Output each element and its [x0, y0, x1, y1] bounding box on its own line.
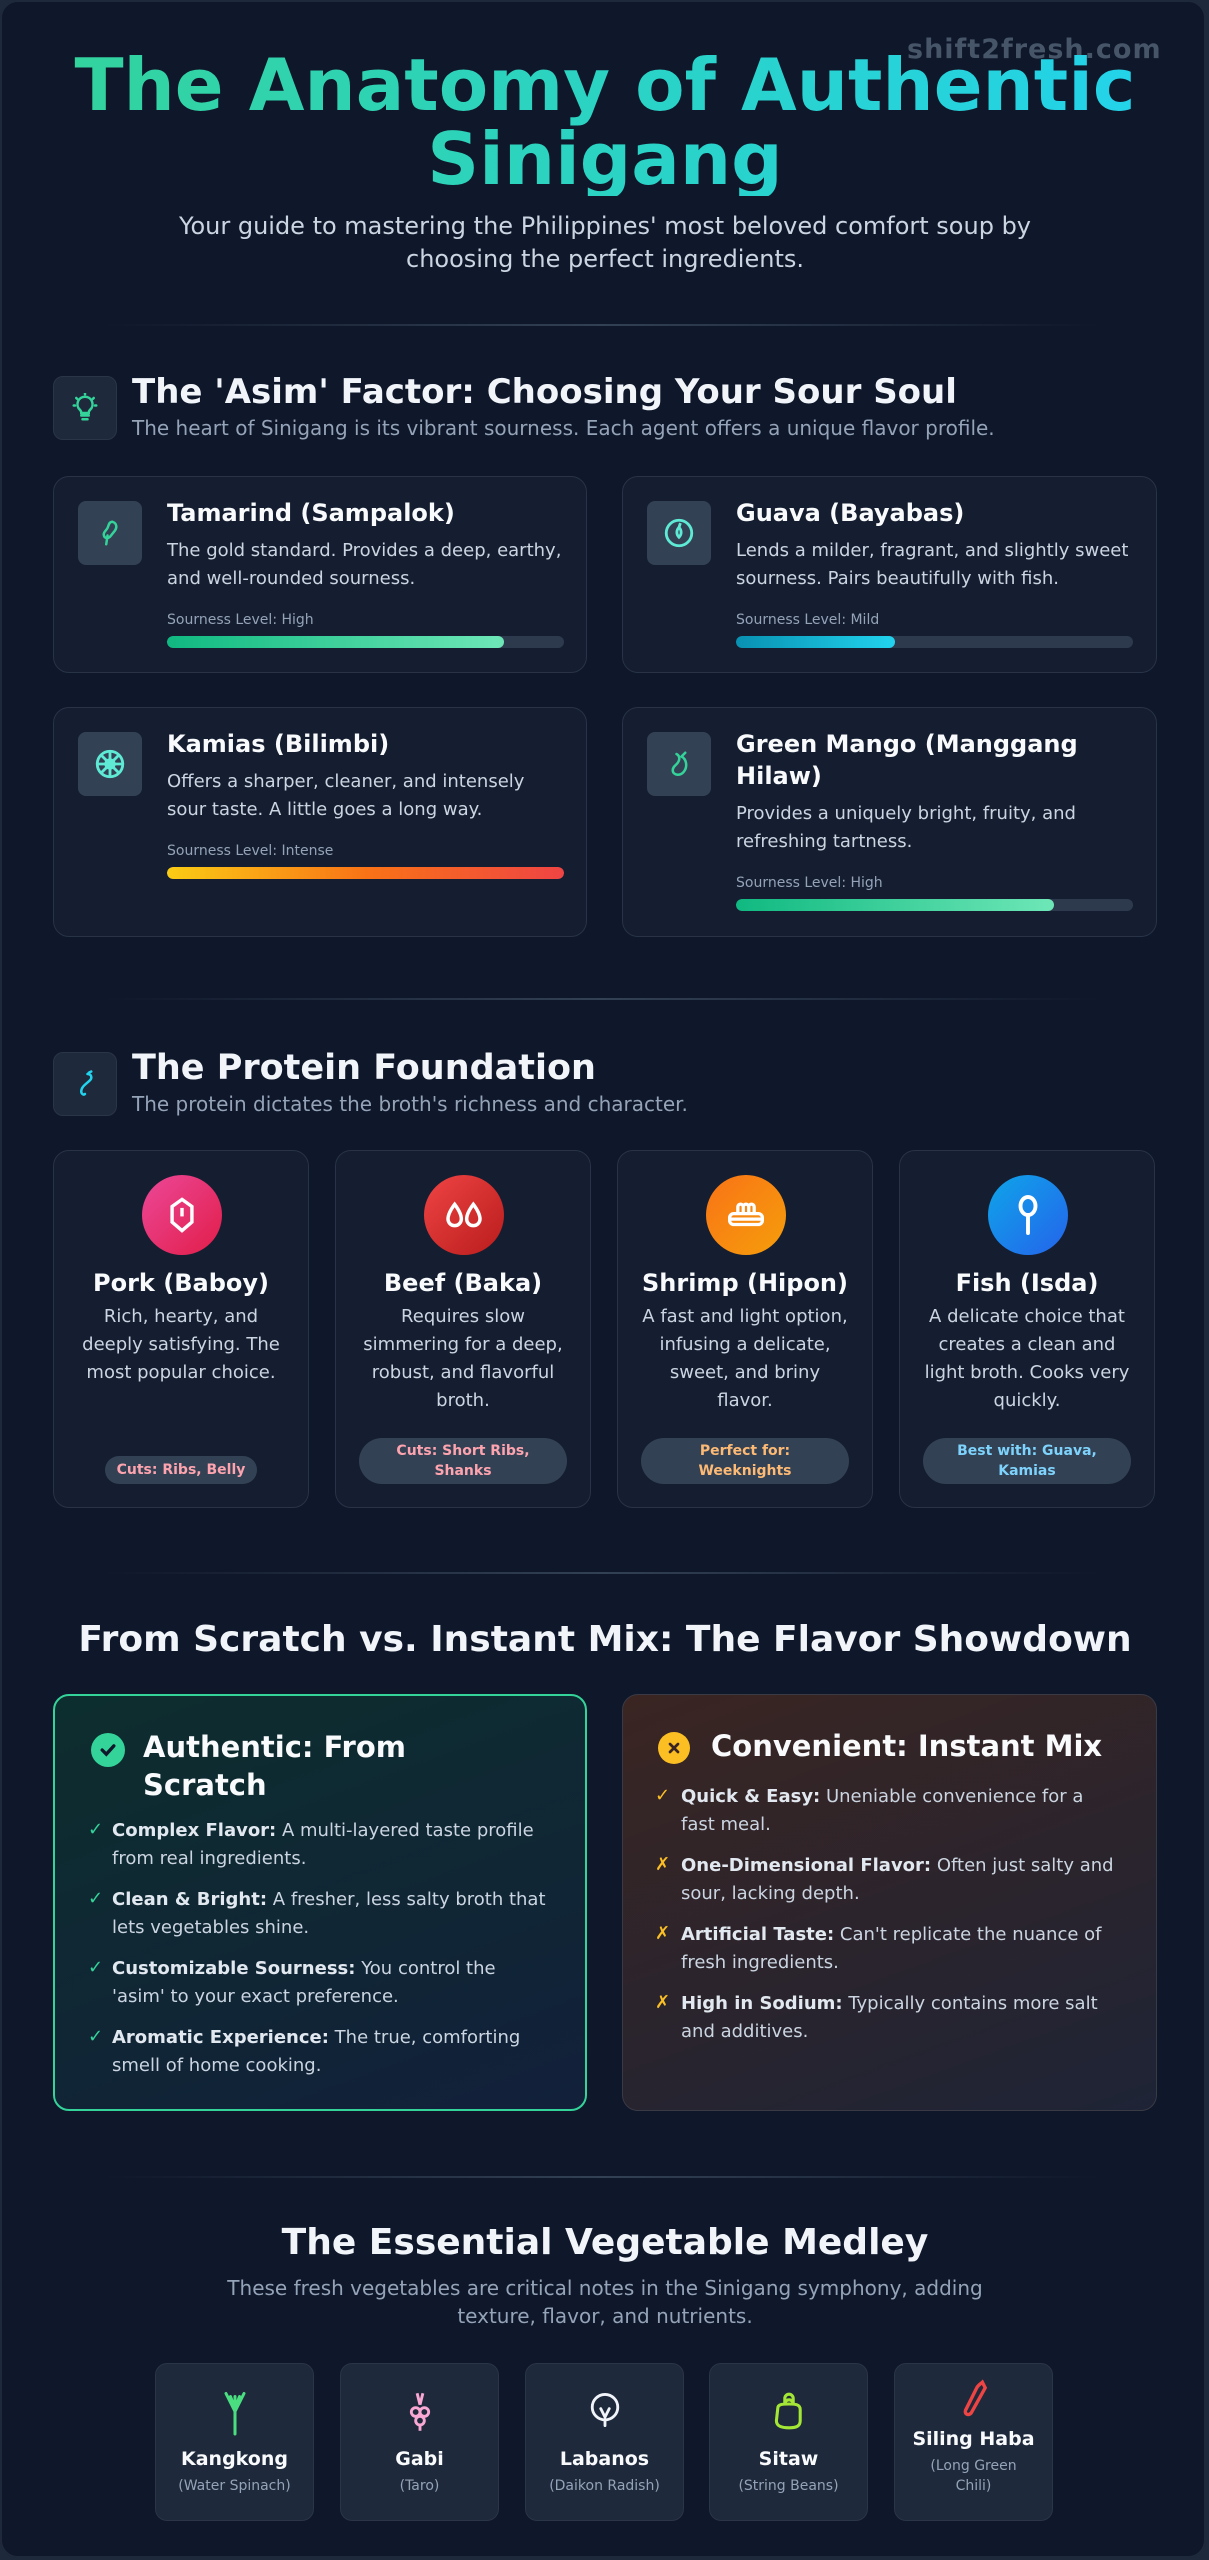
icon: lightbulb	[53, 376, 117, 440]
card: beef: Beef (Baka)	[384, 1269, 542, 1297]
card: green mango: Green Mango (Manggang Hilaw)	[736, 730, 1078, 790]
card: labanos	[525, 2363, 684, 2521]
icon: drop	[53, 1052, 117, 1116]
panel: authentic	[53, 1694, 587, 2111]
card: pork: Pork (Baboy)	[93, 1269, 269, 1297]
card: guava: Sourness Level: Mild	[736, 612, 879, 628]
card: gabi: (Taro)	[400, 2478, 439, 2494]
icon: x	[658, 1732, 690, 1764]
card: fish: Kamias	[998, 1463, 1056, 1479]
card: beef	[335, 1150, 591, 1508]
list: authentic benefits	[88, 1819, 546, 2076]
list: authentic benefits: Aromatic Experience: The true, comforting smell of home cooking.	[112, 2027, 520, 2076]
card: fish: Best with: Guava,	[957, 1443, 1097, 1459]
list: instant mix traits: One-Dimensional Flavor: Often just salty and sour, lacking depth.	[681, 1855, 1114, 1904]
watermark: shift2fresh.com	[907, 34, 1162, 65]
icon: kangkong	[224, 2392, 246, 2436]
card: beef: Requires slow simmering for a deep, robust, and flavorful broth.	[363, 1306, 563, 1411]
bar: mild	[736, 636, 1133, 648]
card: kamias: Sourness Level: Intense	[167, 843, 333, 859]
card: tamarind: The gold standard. Provides a deep, earthy, and well-rounded sourness.	[167, 540, 561, 589]
card: sitaw: Sitaw	[759, 2448, 818, 2470]
card: shrimp: Weeknights	[698, 1463, 792, 1479]
card: kangkong: Kangkong	[181, 2448, 288, 2470]
icon: fish	[988, 1175, 1068, 1255]
subtitle: Your guide to mastering the Philippines' most beloved comfort soup by choosing the perfect ingredients.	[179, 212, 1031, 273]
card: siling haba	[894, 2363, 1053, 2521]
card: kangkong: (Water Spinach)	[178, 2478, 291, 2494]
list: instant mix traits: ✗	[655, 1992, 670, 2013]
list: authentic benefits: ✓	[88, 2026, 103, 2047]
heading: showdown: From Scratch vs. Instant Mix: The Flavor Showdown	[78, 1619, 1132, 1660]
card: green mango: Sourness Level: High	[736, 875, 883, 891]
card: guava: Guava (Bayabas)	[736, 499, 964, 527]
title	[2, 48, 1208, 196]
card: shrimp	[617, 1150, 873, 1508]
subtitle: vegetables: These fresh vegetables are critical notes in the Sinigang symphony, adding texture, flavor, and nutrients.	[227, 2276, 983, 2328]
title: The Anatomy of Authentic	[74, 43, 1136, 127]
list: instant mix traits: ✗	[655, 1854, 670, 1875]
card: sitaw: (String Beans)	[738, 2478, 839, 2494]
list: authentic benefits: Clean & Bright: A fresher, less salty broth that lets vegetables shine.	[112, 1889, 546, 1938]
list: instant mix traits: ✗	[655, 1923, 670, 1944]
list: authentic benefits: Complex Flavor: A multi-layered taste profile from real ingredients.	[112, 1820, 534, 1869]
card: sitaw	[709, 2363, 868, 2521]
card: siling haba: (Long Green Chili)	[930, 2458, 1017, 2494]
title: Sinigang	[427, 117, 783, 201]
card: guava: Lends a milder, fragrant, and slightly sweet sourness. Pairs beautifully with fish.	[736, 540, 1128, 589]
card: fish: A delicate choice that creates a clean and light broth. Cooks very quickly.	[925, 1306, 1129, 1411]
card: beef: Cuts: Short Ribs,	[396, 1443, 530, 1459]
list: authentic benefits: Customizable Sourness: You control the 'asim' to your exact preference.	[112, 1958, 496, 2007]
card: green mango	[622, 707, 1157, 937]
card: labanos: (Daikon Radish)	[549, 2478, 660, 2494]
card: pork	[53, 1150, 309, 1508]
icon: guava	[647, 501, 711, 565]
list: instant mix traits	[655, 1785, 1114, 2042]
icon: check	[91, 1733, 125, 1767]
panel: authentic: Authentic: From	[143, 1730, 406, 1764]
icon: gabi	[410, 2392, 430, 2431]
section heading: asim factor: The heart of Sinigang is its vibrant sourness. Each agent offers a unique flavor profile.	[132, 416, 995, 440]
bar: high	[736, 899, 1133, 911]
card: labanos: Labanos	[560, 2448, 649, 2470]
icon: shrimp	[706, 1175, 786, 1255]
card: gabi	[340, 2363, 499, 2521]
card: shrimp: Perfect for:	[700, 1443, 790, 1459]
card: pork: Rich, hearty, and deeply satisfying. The most popular choice.	[82, 1306, 280, 1383]
icon: pork	[142, 1175, 222, 1255]
card: fish	[899, 1150, 1155, 1508]
list: instant mix traits: High in Sodium: Typically contains more salt and additives.	[681, 1993, 1098, 2042]
list: instant mix traits: Quick & Easy: Uneniable convenience for a fast meal.	[681, 1786, 1083, 1835]
card: shrimp: Shrimp (Hipon)	[642, 1269, 848, 1297]
icon: beef	[424, 1175, 504, 1255]
card: tamarind: Sourness Level: High	[167, 612, 314, 628]
panel: authentic: Scratch	[143, 1768, 267, 1802]
icon: sitaw	[774, 2392, 802, 2430]
card: green mango: Provides a uniquely bright, fruity, and refreshing tartness.	[736, 803, 1076, 852]
card: kangkong	[155, 2363, 314, 2521]
icon: labanos	[590, 2393, 620, 2427]
panel: instant mix: Convenient: Instant Mix	[711, 1729, 1102, 1763]
section heading: protein	[53, 1048, 688, 1116]
icon: kamias	[78, 732, 142, 796]
list: authentic benefits: ✓	[88, 1957, 103, 1978]
card: kamias: Kamias (Bilimbi)	[167, 730, 389, 758]
card: kamias: Offers a sharper, cleaner, and intensely sour taste. A little goes a long way.	[167, 771, 524, 820]
panel: instant mix	[622, 1694, 1157, 2111]
card: tamarind	[53, 476, 587, 673]
icon: chili	[964, 2379, 988, 2416]
heading: vegetables: The Essential Vegetable Medley	[282, 2222, 928, 2263]
icon: tamarind	[78, 501, 142, 565]
list: instant mix traits: Artificial Taste: Can't replicate the nuance of fresh ingredients.	[681, 1924, 1102, 1973]
list: authentic benefits: ✓	[88, 1819, 103, 1840]
card: tamarind: Tamarind (Sampalok)	[167, 499, 455, 527]
list: instant mix traits: ✓	[655, 1785, 670, 1806]
section heading: asim factor	[53, 372, 995, 440]
card: shrimp: A fast and light option, infusing a delicate, sweet, and briny flavor.	[642, 1306, 848, 1411]
card: fish: Fish (Isda)	[956, 1269, 1098, 1297]
card: beef: Shanks	[434, 1463, 492, 1479]
section heading: protein: The Protein Foundation	[132, 1048, 596, 1088]
card: siling haba: Siling Haba	[912, 2428, 1035, 2450]
icon: mango	[647, 732, 711, 796]
bar: intense	[167, 867, 564, 879]
card: pork: Cuts: Ribs, Belly	[117, 1462, 245, 1478]
card: gabi: Gabi	[395, 2448, 444, 2470]
card: kamias	[53, 707, 587, 937]
list: authentic benefits: ✓	[88, 1888, 103, 1909]
section heading: asim factor: The 'Asim' Factor: Choosing Your Sour Soul	[132, 372, 957, 412]
section heading: protein: The protein dictates the broth's richness and character.	[132, 1092, 688, 1116]
bar: high	[167, 636, 564, 648]
card: guava	[622, 476, 1157, 673]
